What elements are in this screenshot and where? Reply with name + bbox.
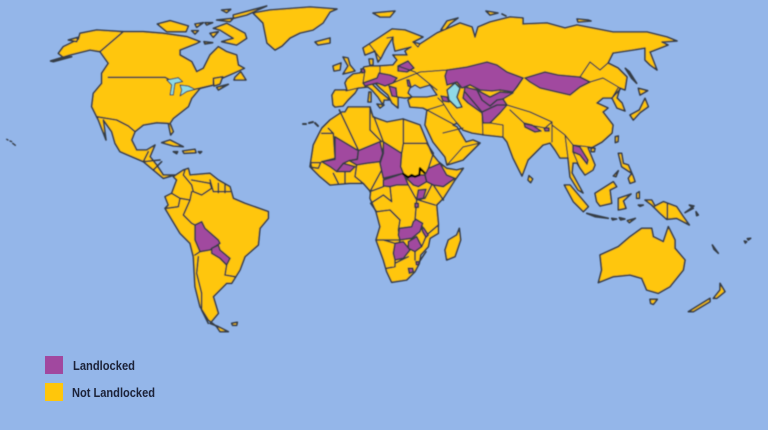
Nepal [524,123,541,132]
Black Sea [408,85,437,97]
legend swatch: landlocked [45,356,63,374]
Novaya Zemlya [441,18,458,30]
Zambia [398,219,423,240]
Ethiopia [425,163,455,187]
New Guinea [645,200,689,225]
Luxembourg [361,69,365,73]
Australia [598,227,685,293]
Paraguay [212,245,230,265]
Great Lakes [167,78,195,96]
Central Europe [363,73,397,86]
Sumatra [564,185,588,212]
Caspian Sea [447,83,462,108]
Botswana [393,242,410,260]
Hawaii [7,139,15,145]
Niger [349,142,383,165]
Sudan border, thick black [403,168,425,177]
Central Asian borders [465,85,507,112]
Caribbean islands [162,140,202,154]
Vanuatu and Fiji [712,238,751,253]
Belarus [398,61,414,72]
Java and Lesser Sunda [587,213,635,223]
Bhutan [544,128,549,131]
Falkland Islands [232,322,237,325]
world map [7,6,751,332]
Armenia and Azerbaijan [441,96,449,102]
Hainan [591,148,595,152]
Iceland [315,38,330,45]
Canary Islands [303,122,318,126]
Mongolia [525,72,590,95]
Serbia and Macedonia [389,86,397,97]
New Guinea border [665,204,670,219]
Kazakhstan [445,62,523,92]
legend [45,356,155,401]
Borneo [595,182,617,206]
Oceania and Southeast Asian islands [528,136,751,312]
Tasmania [650,299,657,304]
Arctic islands [51,6,267,90]
Svalbard [373,11,395,17]
Rwanda and Burundi [415,203,418,207]
Bolivia [195,222,220,252]
legend label: landlocked: Landlocked [73,359,135,373]
Denmark [369,59,373,65]
legend swatch: not landlocked [45,383,63,401]
Central African Republic [383,173,408,187]
Chad [380,142,403,178]
Eswatini [416,262,419,265]
Uganda [417,189,426,199]
Africa [310,107,463,282]
Zimbabwe [408,237,422,252]
North American borders [97,32,213,170]
Japan and Sakhalin [612,68,648,120]
Eurasia [332,17,677,193]
Moldova [407,80,411,87]
Lesotho [408,268,413,273]
Burkina Faso [337,163,355,172]
Malawi [422,226,428,237]
Sri Lanka [528,176,533,183]
North America [7,6,267,178]
Eurasian borders [346,37,620,168]
Mali [322,137,358,172]
Central Asia [463,87,513,123]
Madagascar [445,228,461,260]
legend label: not landlocked: Not Landlocked [72,386,155,400]
Laos [573,145,588,164]
South American borders [167,170,235,323]
Sicily, Sardinia, Corsica [368,92,384,108]
Korea border [612,89,620,98]
New Zealand [688,283,725,312]
Philippines [613,153,635,183]
Greenland [253,7,337,50]
South Sudan [405,175,427,187]
Gambia and Guinea-Bissau [311,163,321,168]
Taiwan [615,136,618,143]
Great Britain and Ireland [333,57,355,74]
Moluccas and Bismarck [637,192,698,216]
Sulawesi [618,194,631,210]
African borders [322,107,447,268]
South America [165,168,268,332]
Arctic Russian islands [486,11,591,22]
